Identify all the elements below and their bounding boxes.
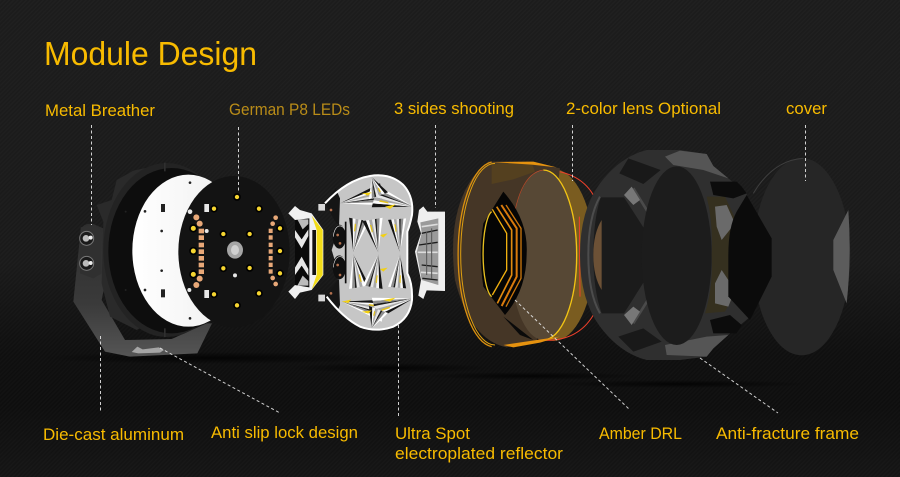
leader lines — [92, 125, 806, 418]
label: Anti-fracture frame: Anti-fracture frame — [716, 425, 859, 443]
reflector left scallops — [325, 188, 346, 316]
label: Amber DRL: Amber DRL — [599, 425, 682, 443]
label: Anti slip lock design: Anti slip lock design — [211, 424, 358, 442]
label: Metal Breather: Metal Breather — [45, 102, 156, 120]
housing and bracket — [73, 163, 290, 357]
label: Ultra Spot electroplated reflector: electroplated reflector — [395, 445, 564, 463]
amber DRL — [481, 192, 527, 315]
label: cover: cover — [786, 100, 828, 118]
exploded lamp module — [73, 150, 850, 360]
LED circuit board — [178, 176, 290, 327]
ultra spot electroplated reflector — [325, 174, 416, 332]
amber lens — [453, 162, 594, 347]
anti-fracture frame — [580, 150, 753, 360]
shooting reflector left — [288, 204, 325, 301]
shooting reflector right — [415, 206, 445, 299]
label: German P8 LEDs: German P8 LEDs — [229, 101, 350, 119]
title: Module Design — [44, 36, 257, 73]
label: 3 sides shooting: 3 sides shooting — [394, 100, 514, 118]
white board — [132, 175, 244, 327]
label: Die-cast aluminum: Die-cast aluminum — [43, 426, 184, 444]
label: 2-color lens Optional: 2-color lens Optional — [566, 100, 721, 118]
metal breather screws — [80, 224, 102, 278]
cover — [728, 158, 850, 355]
label: Ultra Spot electroplated reflector: Ultra Spot — [395, 425, 470, 443]
